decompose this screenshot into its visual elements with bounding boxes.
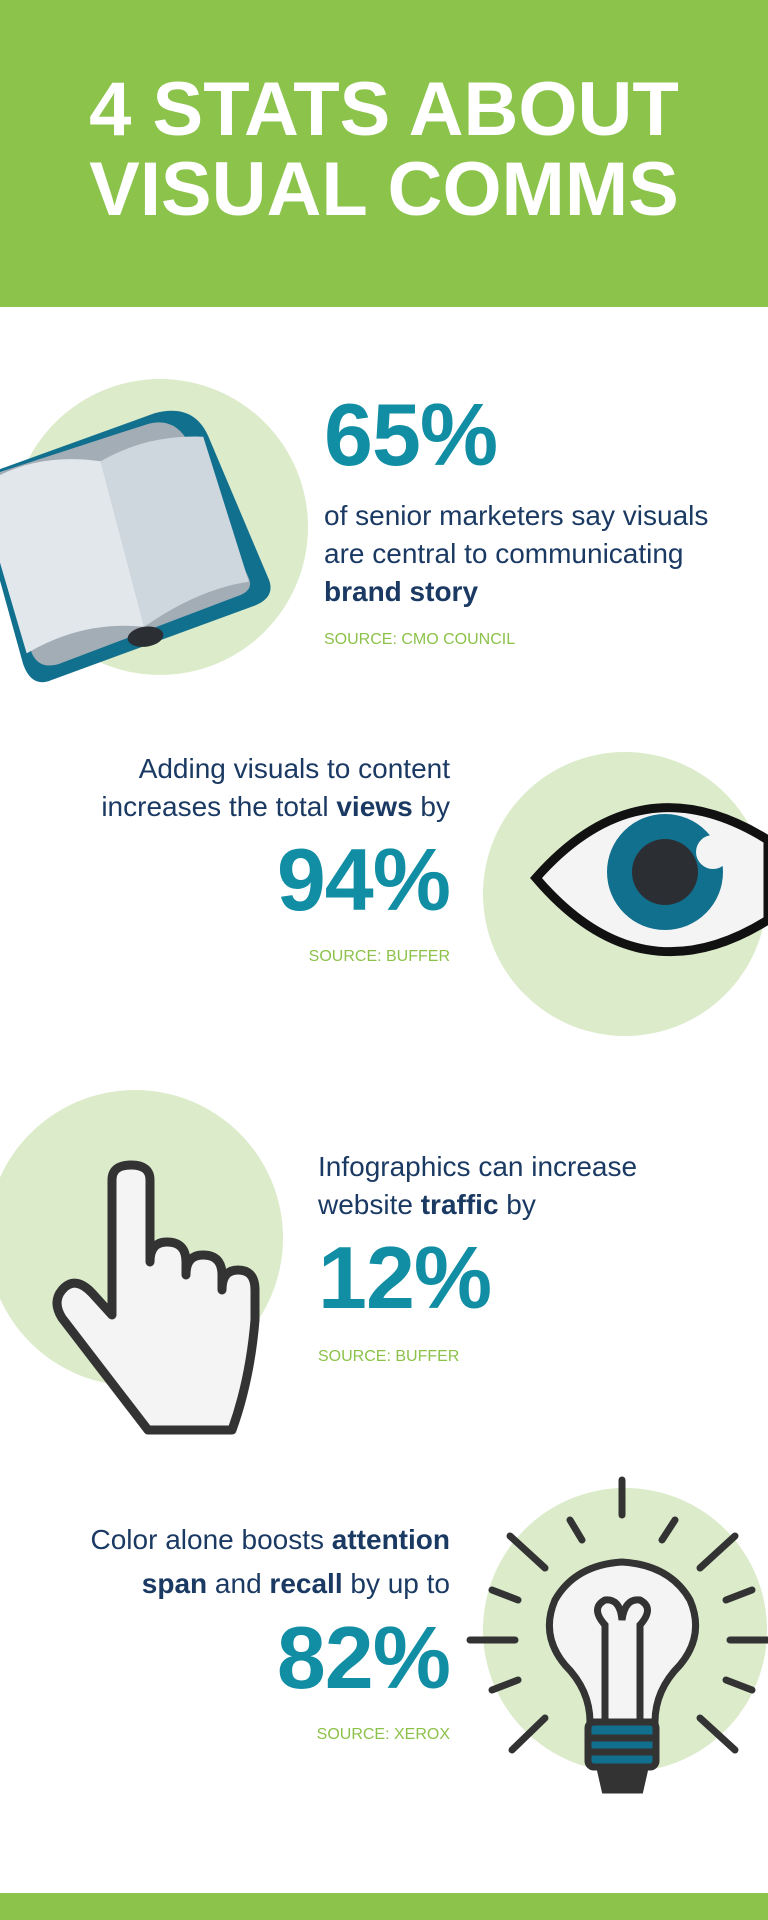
circle 1: [12, 379, 308, 675]
header: [0, 0, 768, 307]
source 4: SOURCE: XEROX: [317, 1726, 450, 1743]
source 2: SOURCE: BUFFER: [309, 948, 450, 965]
icon: hand: [57, 1165, 255, 1430]
source 3: SOURCE: BUFFER: [318, 1348, 459, 1365]
title: 4 STATS ABOUT: [89, 67, 679, 152]
stat 1: [324, 385, 708, 648]
title: VISUAL COMMS: [89, 147, 679, 232]
number 94%: 94%: [277, 830, 450, 929]
text 2: Adding visuals to content increases the total views by: [101, 753, 450, 822]
source 1: SOURCE: CMO COUNCIL: [324, 631, 515, 648]
icon: lightbulb: [470, 1480, 768, 1790]
icon: eye: [536, 808, 768, 952]
text 1: of senior marketers say visuals are central to communicating brand story: [324, 500, 708, 607]
title: [89, 67, 679, 232]
circle 4: [483, 1488, 767, 1772]
circle 3: [0, 1090, 283, 1386]
number 82%: 82%: [277, 1608, 450, 1707]
stat 4: [91, 1524, 450, 1743]
text 4: Color alone boosts attention span and recall by up to: [91, 1524, 450, 1599]
stat 2: [101, 753, 450, 965]
footer bar: [0, 1893, 768, 1920]
icon: book: [0, 400, 279, 688]
stat 3: [318, 1151, 637, 1365]
number 12%: 12%: [318, 1228, 491, 1327]
number 65%: 65%: [324, 385, 497, 484]
text 3: Infographics can increase website traffic by: [318, 1151, 637, 1220]
circle 2: [483, 752, 767, 1036]
